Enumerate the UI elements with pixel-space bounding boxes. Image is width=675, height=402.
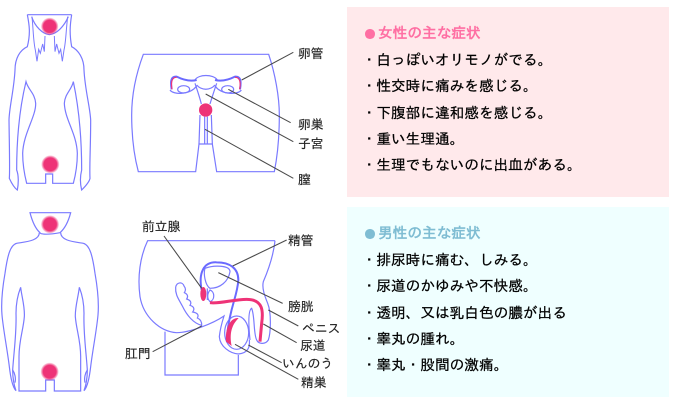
male symptom 1: ・排尿時に痛む、しみる。 [362,253,538,269]
male labels: いんのう [282,356,333,371]
female pelvis diagram [132,54,279,172]
male heading: 男性の主な症状 [378,226,481,242]
male symptom 3: ・透明、又は乳白色の膿が出る [362,306,567,322]
panel: female symptoms [347,7,669,197]
female symptom 4: ・重い生理通。 [362,132,464,148]
male labels: 精巣 [301,375,327,390]
male labels: 前立腺 [142,219,181,234]
female labels [298,46,324,187]
male symptom 4: ・睾丸の腫れ。 [362,332,464,348]
male body figure [2,213,98,391]
female heading: 女性の主な症状 [378,26,481,42]
male labels: 膀胱 [288,299,314,314]
female symptom 3: ・下腹部に違和感を感じる。 [362,106,552,122]
female leader lines [205,52,293,178]
male symptom 2: ・尿道のかゆみや不快感。 [362,279,538,295]
female labels: 子宮 [298,136,324,151]
male pelvis diagram [139,241,275,375]
female symptom 5: ・生理でもないのに出血がある。 [362,158,582,174]
female body figure [9,15,91,190]
female symptom 2: ・性交時に痛みを感じる。 [362,79,538,95]
male symptom 5: ・睾丸・股間の激痛。 [362,358,508,374]
female labels: 卵巣 [298,117,324,132]
female labels: 卵管 [298,46,324,61]
male labels [125,219,340,390]
male labels: 尿道 [300,338,326,353]
female labels: 膣 [298,172,311,187]
female symptom 1: ・白っぽいオリモノがでる。 [362,53,552,69]
panel: male symptoms [347,207,669,397]
male labels: 肛門 [125,346,151,361]
male labels: 精管 [288,233,314,248]
male labels: ペニス [302,321,340,336]
male leader lines [153,236,298,379]
